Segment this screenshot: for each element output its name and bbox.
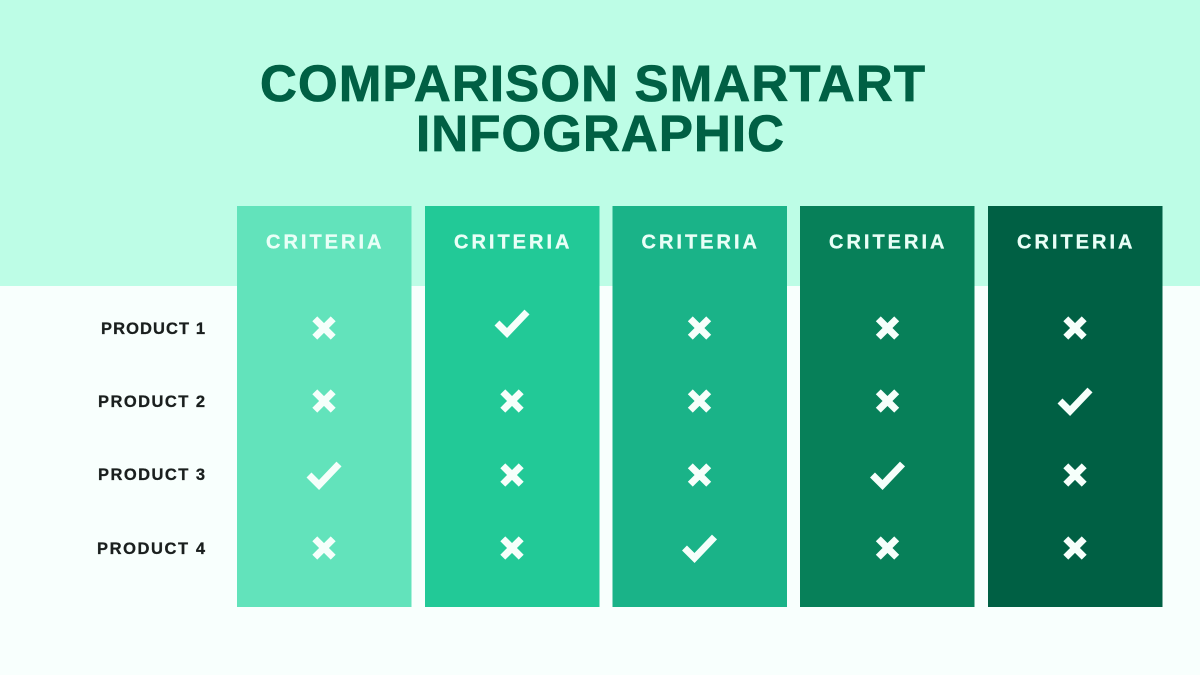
column 2 icon: cross, product 3 (503, 466, 521, 484)
column 3 icon: check, product 4 (684, 537, 714, 558)
column 2 icon: cross, product 2 (503, 392, 521, 410)
panel: criteria column 1 (237, 206, 412, 607)
column 5 icon: check, product 2 (1060, 390, 1090, 411)
label: product 1: PRODUCT 1 (101, 320, 205, 338)
column 3 icon: cross, product 2 (690, 392, 709, 410)
column 3 icon: cross, product 1 (690, 319, 709, 337)
title: INFOGRAPHIC (416, 105, 784, 162)
column 4 icon: cross, product 4 (878, 539, 897, 557)
column 5 icon: cross, product 4 (1066, 539, 1084, 557)
column 5 icon: cross, product 1 (1066, 319, 1084, 337)
panel: criteria column 2 (425, 206, 600, 607)
column 1 icon: cross, product 4 (315, 539, 333, 557)
column 4 icon: cross, product 1 (878, 319, 897, 337)
row labels (97, 320, 206, 558)
column 5 icon: cross, product 3 (1066, 466, 1084, 484)
column 4 icon: cross, product 2 (878, 392, 897, 410)
column 5 heading: CRITERIA (1017, 232, 1135, 254)
column 1 icon: cross, product 1 (315, 319, 333, 337)
label: product 3: PRODUCT 3 (98, 466, 205, 484)
column 2 icon: check, product 1 (497, 312, 527, 333)
column 1 icon: check, product 3 (309, 464, 339, 485)
panel: criteria column 3 (612, 206, 787, 607)
column 3 icon: cross, product 3 (690, 466, 709, 484)
column 1 heading: CRITERIA (266, 232, 384, 254)
title (260, 55, 925, 162)
column 3 heading: CRITERIA (642, 232, 760, 254)
label: product 4: PRODUCT 4 (97, 540, 206, 558)
header band (0, 0, 1200, 286)
column 1 icon: cross, product 2 (315, 392, 333, 410)
column 4 heading: CRITERIA (829, 232, 947, 254)
label: product 2: PRODUCT 2 (98, 393, 205, 411)
column 2 heading: CRITERIA (454, 232, 572, 254)
column 4 icon: check, product 3 (872, 464, 902, 485)
column 2 icon: cross, product 4 (503, 539, 521, 557)
panel: criteria column 4 (800, 206, 974, 607)
title: COMPARISON SMARTART (260, 55, 925, 112)
panel: criteria column 5 (988, 206, 1162, 607)
